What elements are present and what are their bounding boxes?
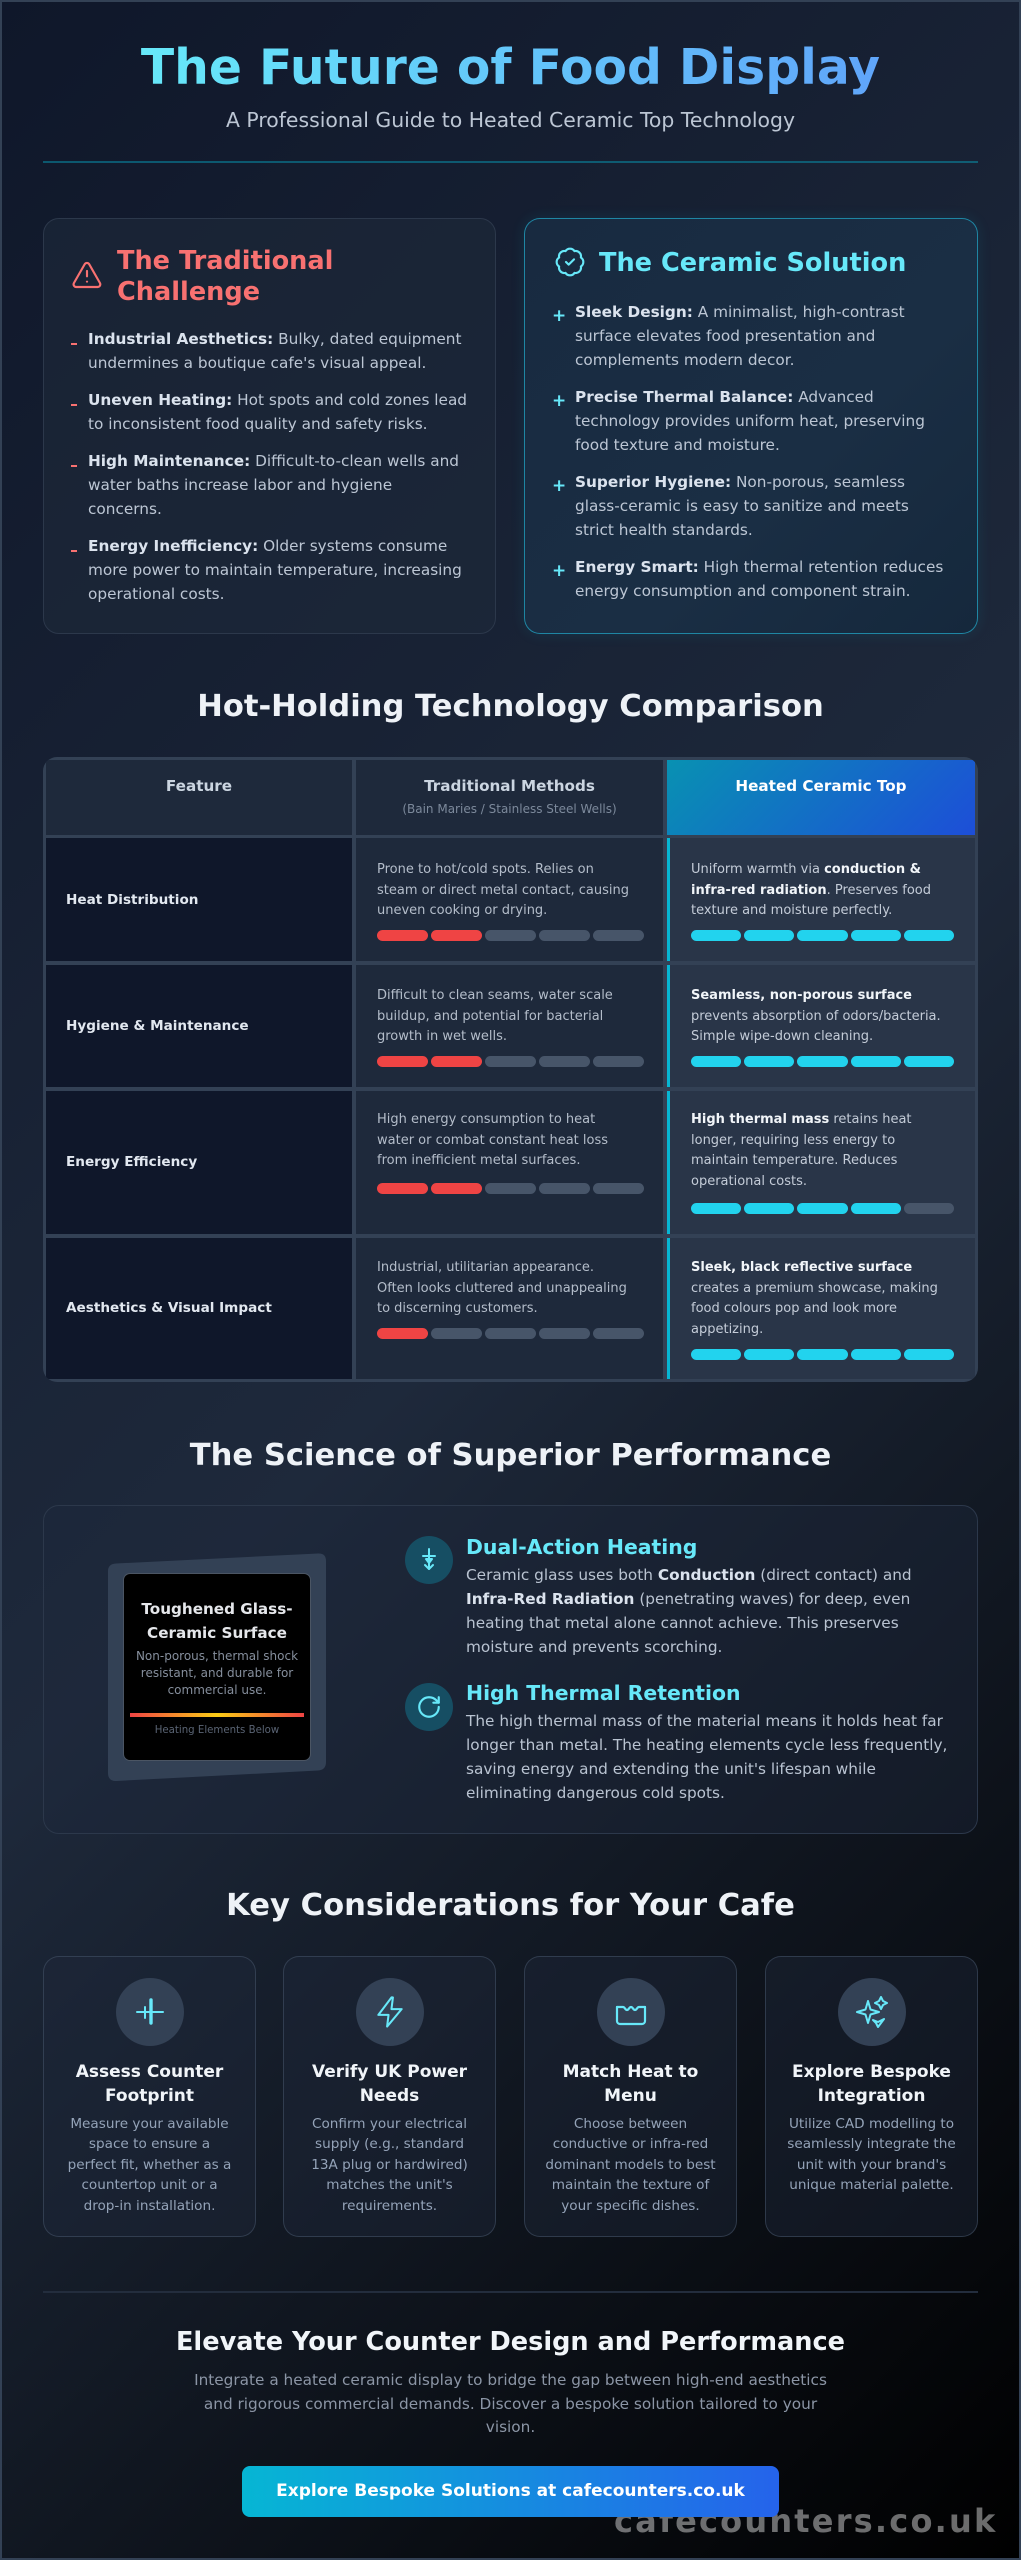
header: feature	[46, 760, 352, 835]
list: solution points: strict health standards.	[575, 521, 753, 539]
title: The Future of Food Display	[141, 39, 880, 96]
text: space to ensure a	[89, 2136, 210, 2152]
icon: badge check	[556, 248, 584, 276]
card: explore bespoke integration	[765, 1956, 978, 2237]
row: aesthetics and visual impact: to discerning customers.	[377, 1301, 538, 1316]
text	[311, 2116, 468, 2214]
row: aesthetics and visual impact: Often looks cluttered and unappealing	[377, 1281, 627, 1296]
heading: Verify UK Power	[312, 2062, 467, 2082]
text	[545, 2116, 716, 2214]
heading: Match Heat to	[563, 2062, 698, 2082]
black surface: Non-porous, thermal shock	[136, 1649, 298, 1663]
heading: Menu	[604, 2086, 657, 2106]
list: challenge points: undermines a boutique cafe's visual appeal.	[88, 354, 426, 372]
black surface: commercial use.	[168, 1683, 266, 1697]
panel: the ceramic solution	[524, 218, 978, 634]
row: heat distribution: uneven cooking or drying.	[377, 903, 547, 918]
call to action text: vision.	[486, 2418, 535, 2436]
row: hygiene and maintenance: Seamless, non-porous surface	[691, 988, 912, 1003]
text: unique material palette.	[789, 2177, 954, 2193]
icon: sparkles	[838, 1978, 906, 2046]
row: aesthetics and visual impact: Industrial, utilitarian appearance.	[377, 1260, 594, 1275]
text: Choose between	[574, 2116, 687, 2132]
row: heat distribution: infra-red radiation. Preserves food	[691, 883, 931, 898]
text: Confirm your electrical	[312, 2116, 467, 2132]
row: heat distribution: texture and moisture perfectly.	[691, 903, 892, 918]
list: challenge points: to inconsistent food quality and safety risks.	[88, 415, 428, 433]
list: challenge points	[71, 330, 467, 603]
body: Infra-Red Radiation (penetrating waves) for deep, even	[466, 1590, 910, 1608]
tilted frame	[108, 1554, 326, 1781]
call to action text: and rigorous commercial demands. Discover a bespoke solution tailored to your	[204, 2395, 817, 2413]
text: your specific dishes.	[561, 2198, 700, 2214]
list: solution points	[552, 303, 943, 600]
body: moisture and prevents scorching.	[466, 1638, 722, 1656]
row: heat distribution	[46, 838, 975, 961]
text: unit with your brand's	[797, 2157, 946, 2173]
row: energy efficiency: maintain temperature. Reduces	[691, 1153, 897, 1168]
heading: Explore Bespoke	[792, 2062, 951, 2082]
row: heat distribution: Heat Distribution	[66, 892, 198, 908]
heading: call to action: Elevate Your Counter Design and Performance	[176, 2327, 845, 2357]
row: hygiene and maintenance	[46, 965, 975, 1087]
black surface: Heating Elements Below	[155, 1725, 279, 1736]
heading: comparison: Hot-Holding Technology Comparison	[197, 689, 824, 724]
heading: challenge: Challenge	[117, 277, 260, 307]
text	[68, 2116, 231, 2214]
row: energy efficiency: from inefficient metal surfaces.	[377, 1153, 580, 1168]
row: aesthetics and visual impact	[46, 1238, 975, 1379]
row: aesthetics and visual impact: creates a premium showcase, making	[691, 1281, 938, 1296]
row: energy efficiency: High thermal mass retains heat	[691, 1112, 912, 1127]
list: solution points: Precise Thermal Balance: Advanced	[575, 388, 874, 406]
card: verify uk power needs	[283, 1956, 496, 2237]
list: solution points: food texture and moisture.	[575, 436, 780, 454]
heading: Integration	[818, 2086, 925, 2106]
button: Explore Bespoke Solutions at cafecounters.co.uk	[276, 2481, 745, 2501]
row: hygiene and maintenance: Simple wipe-down cleaning.	[691, 1029, 873, 1044]
list: solution points: surface elevates food presentation and	[575, 327, 875, 345]
header: traditional methods	[356, 760, 663, 835]
card: match heat to menu	[524, 1956, 737, 2237]
row: aesthetics and visual impact: Sleek, black reflective surface	[691, 1260, 912, 1275]
heading: High Thermal Retention	[466, 1681, 741, 1705]
row: energy efficiency: High energy consumption to heat	[377, 1112, 595, 1127]
list: solution points: +	[552, 476, 566, 496]
list: challenge points: Uneven Heating: Hot spots and cold zones lead	[88, 391, 467, 409]
heading: science: The Science of Superior Performance	[190, 1438, 831, 1473]
heading: considerations: Key Considerations for Your Cafe	[226, 1888, 795, 1923]
row: heat distribution: Prone to hot/cold spots. Relies on	[377, 862, 594, 877]
panel: science of performance	[43, 1505, 978, 1834]
list: challenge points: Energy Inefficiency: Older systems consume	[88, 537, 447, 555]
row: hygiene and maintenance: buildup, and potential for bacterial	[377, 1009, 603, 1024]
body	[466, 1566, 912, 1656]
heading: Dual-Action Heating	[466, 1535, 697, 1559]
row: heat distribution: steam or direct metal contact, causing	[377, 883, 629, 898]
list: challenge points: High Maintenance: Difficult-to-clean wells and	[88, 452, 459, 470]
heading: Footprint	[105, 2086, 194, 2106]
heading	[76, 2062, 224, 2106]
heading: challenge: The Traditional	[117, 246, 333, 276]
list: solution points: complements modern decor.	[575, 351, 794, 369]
icon: warning triangle	[72, 262, 102, 288]
panel: the traditional challenge	[43, 218, 496, 634]
body: longer than metal. The heating elements cycle less frequently,	[466, 1736, 947, 1754]
row: heat distribution: Uniform warmth via conduction &	[691, 862, 921, 877]
header: traditional methods: Traditional Methods	[424, 777, 595, 795]
call to action text: Integrate a heated ceramic display to bridge the gap between high-end aesthetics	[194, 2371, 827, 2389]
body: The high thermal mass of the material means it holds heat far	[466, 1712, 943, 1730]
row: aesthetics and visual impact: appetizing.	[691, 1322, 763, 1337]
heading	[792, 2062, 951, 2106]
text: maintain the texture of	[552, 2177, 709, 2193]
list: solution points: glass-ceramic is easy to sanitize and meets	[575, 497, 909, 515]
text	[787, 2116, 956, 2193]
text: dominant models to best	[545, 2157, 716, 2173]
text: 13A plug or hardwired)	[311, 2157, 468, 2173]
text: requirements.	[342, 2198, 437, 2214]
row: energy efficiency: operational costs.	[691, 1174, 807, 1189]
body	[466, 1712, 947, 1802]
row: hygiene and maintenance: growth in wet wells.	[377, 1029, 507, 1044]
list: solution points: technology provides uniform heat, preserving	[575, 412, 925, 430]
card: assess counter footprint	[43, 1956, 256, 2237]
row: energy efficiency	[46, 1091, 975, 1234]
black surface	[123, 1573, 311, 1761]
list: challenge points: water baths increase labor and hygiene	[88, 476, 392, 494]
black surface: resistant, and durable for	[141, 1666, 293, 1680]
row: hygiene and maintenance: Hygiene & Maintenance	[66, 1018, 249, 1034]
subtitle: A Professional Guide to Heated Ceramic Top Technology	[226, 108, 795, 132]
row: energy efficiency: longer, requiring less energy to	[691, 1133, 895, 1148]
row: energy efficiency: water or combat constant heat loss	[377, 1133, 608, 1148]
row: aesthetics and visual impact: Aesthetics & Visual Impact	[66, 1300, 272, 1316]
glass-ceramic diagram	[108, 1554, 326, 1781]
heading: Assess Counter	[76, 2062, 223, 2082]
icon: refresh	[405, 1683, 453, 1731]
list: challenge points: more power to maintain temperature, increasing	[88, 561, 462, 579]
heading: solution: The Ceramic Solution	[599, 248, 906, 278]
icon: soup bowl	[597, 1978, 665, 2046]
text: matches the unit's	[326, 2177, 453, 2193]
header: heated ceramic top: Heated Ceramic Top	[735, 777, 907, 795]
body: saving energy and extending the unit's lifespan while	[466, 1760, 876, 1778]
black surface: Ceramic Surface	[147, 1624, 287, 1642]
body: heating that metal alone cannot achieve. This preserves	[466, 1614, 899, 1632]
watermark: cafecounters.co.uk	[614, 2502, 997, 2540]
icon: lightning bolt	[356, 1978, 424, 2046]
black surface: Toughened Glass-	[141, 1600, 293, 1618]
heading: challenge	[117, 246, 333, 307]
row: hygiene and maintenance: Difficult to clean seams, water scale	[377, 988, 613, 1003]
header: heated ceramic top	[667, 760, 975, 835]
feature: dual-action heating	[405, 1535, 912, 1656]
list: solution points: Energy Smart: High thermal retention reduces	[575, 558, 943, 576]
list: challenge points: operational costs.	[88, 585, 224, 603]
list: solution points: +	[552, 561, 566, 581]
text: Utilize CAD modelling to	[789, 2116, 954, 2132]
text: conductive or infra-red	[553, 2136, 708, 2152]
body: eliminating dangerous cold spots.	[466, 1784, 725, 1802]
heading	[563, 2062, 698, 2106]
text: countertop unit or a	[81, 2177, 218, 2193]
list: solution points: +	[552, 306, 566, 326]
call to action text	[194, 2371, 827, 2436]
list: challenge points: Industrial Aesthetics: Bulky, dated equipment	[88, 330, 462, 348]
button	[242, 2466, 779, 2517]
text: drop-in installation.	[84, 2198, 215, 2214]
header: feature: Feature	[166, 777, 232, 795]
text: perfect fit, whether as a	[68, 2157, 231, 2173]
text: seamlessly integrate the	[787, 2136, 956, 2152]
list: solution points: +	[552, 391, 566, 411]
feature: high thermal retention	[405, 1681, 947, 1802]
text: supply (e.g., standard	[315, 2136, 464, 2152]
heading: Needs	[360, 2086, 419, 2106]
heading	[312, 2062, 467, 2106]
row: aesthetics and visual impact: food colours pop and look more	[691, 1301, 897, 1316]
icon: heat down arrow	[405, 1536, 453, 1584]
list: solution points: energy consumption and component strain.	[575, 582, 911, 600]
comparison table	[43, 757, 978, 1382]
list: solution points: Sleek Design: A minimalist, high-contrast	[575, 303, 905, 321]
body: Ceramic glass uses both Conduction (direct contact) and	[466, 1566, 912, 1584]
header: traditional methods: (Bain Maries / Stainless Steel Wells)	[402, 802, 617, 816]
text: Measure your available	[70, 2116, 229, 2132]
list: challenge points: concerns.	[88, 500, 162, 518]
icon: footprint cross	[116, 1978, 184, 2046]
list: solution points: Superior Hygiene: Non-porous, seamless	[575, 473, 905, 491]
row: energy efficiency: Energy Efficiency	[66, 1154, 197, 1170]
row: hygiene and maintenance: prevents absorption of odors/bacteria.	[691, 1009, 941, 1024]
